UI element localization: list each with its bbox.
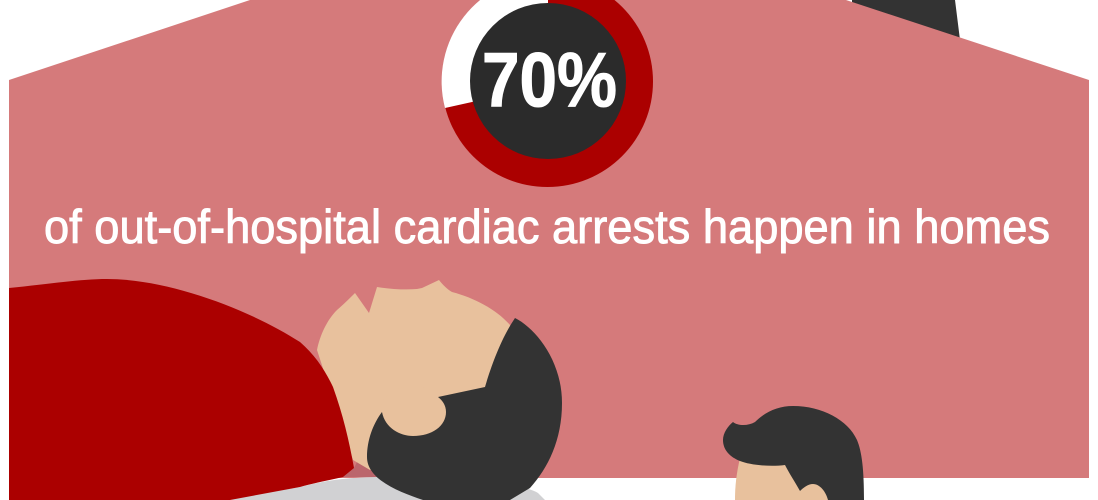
donut chart: 70 percent — [442, 0, 653, 187]
donut centre — [470, 3, 626, 159]
rescuer hair — [723, 406, 864, 500]
rescuer face — [735, 450, 830, 500]
patient ear — [380, 386, 446, 436]
patient illustration — [9, 279, 562, 500]
caption text: of out-of-hospital cardiac arrests happen in homes — [44, 200, 1050, 253]
rescuer body fragment behind the roof — [852, 0, 960, 40]
donut ring: white remainder — [442, 0, 548, 108]
pillow under patient head — [225, 477, 545, 500]
patient shirt — [9, 279, 354, 500]
patient face — [317, 280, 510, 470]
rescuer illustration — [723, 406, 864, 500]
donut ring: red share — [442, 0, 653, 187]
patient neck shadow — [343, 460, 380, 477]
statistic: 70%: 70% — [482, 38, 617, 124]
patient hair — [367, 318, 562, 500]
